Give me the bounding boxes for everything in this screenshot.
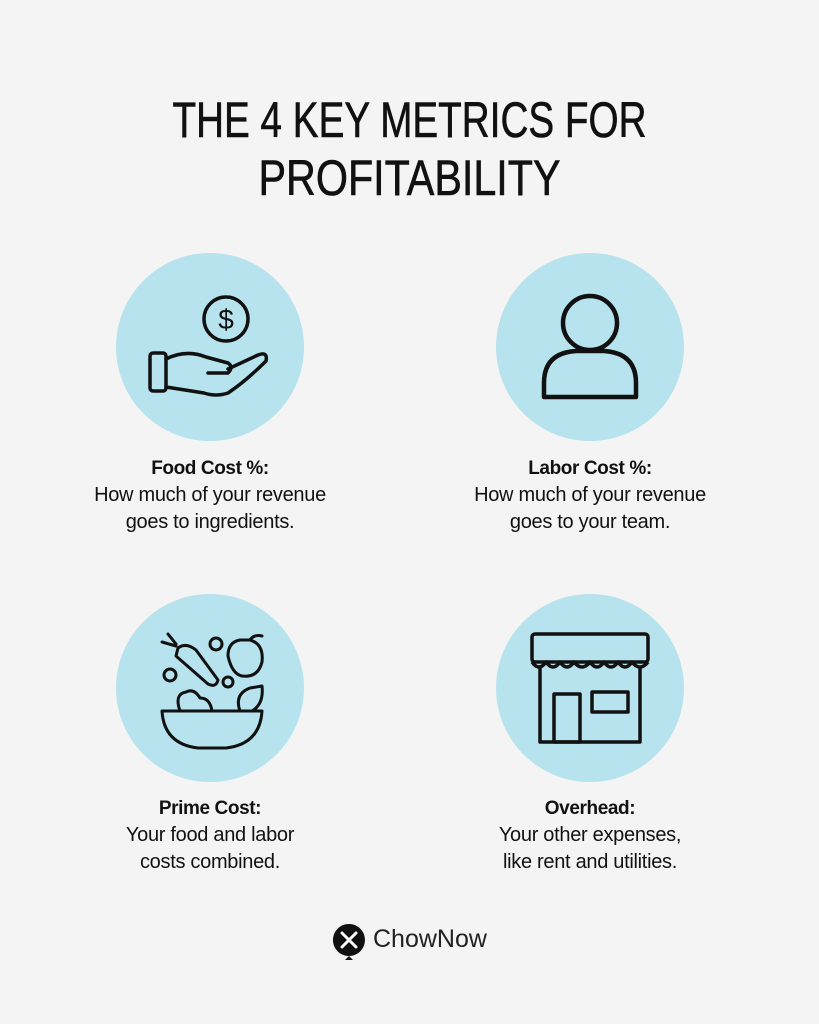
text: prime cost: Prime Cost: xyxy=(159,798,261,819)
icon: person xyxy=(496,253,684,441)
text: labor cost: Labor Cost %: xyxy=(528,458,652,479)
logo: ChowNow xyxy=(332,924,487,960)
text: food cost xyxy=(94,458,326,533)
panel: food cost xyxy=(94,253,326,533)
title xyxy=(172,92,646,206)
text: prime cost xyxy=(126,798,294,873)
text: overhead: Your other expenses, xyxy=(499,824,681,846)
text: labor cost: goes to your team. xyxy=(510,511,670,533)
text: prime cost: costs combined. xyxy=(140,851,280,873)
icon: salad bowl xyxy=(116,594,304,782)
panel: prime cost xyxy=(116,594,304,873)
title: PROFITABILITY xyxy=(258,150,560,206)
text: food cost: goes to ingredients. xyxy=(126,511,294,533)
text: overhead: like rent and utilities. xyxy=(503,851,677,873)
text: overhead: Overhead: xyxy=(545,798,635,819)
title: THE 4 KEY METRICS FOR xyxy=(172,92,646,148)
icon: hand with coin xyxy=(116,253,304,441)
text: food cost: Food Cost %: xyxy=(151,458,269,479)
panel: labor cost xyxy=(474,253,706,533)
text: labor cost xyxy=(474,458,706,533)
icon: storefront xyxy=(496,594,684,782)
panel: overhead xyxy=(496,594,684,873)
text: overhead xyxy=(499,798,681,873)
text: labor cost: How much of your revenue xyxy=(474,484,706,506)
icon: logo pin xyxy=(332,924,365,960)
text: brand name: ChowNow xyxy=(373,925,487,953)
text: prime cost: Your food and labor xyxy=(126,824,294,846)
text: food cost: How much of your revenue xyxy=(94,484,326,506)
icon: hand with coin: $ xyxy=(218,304,234,335)
